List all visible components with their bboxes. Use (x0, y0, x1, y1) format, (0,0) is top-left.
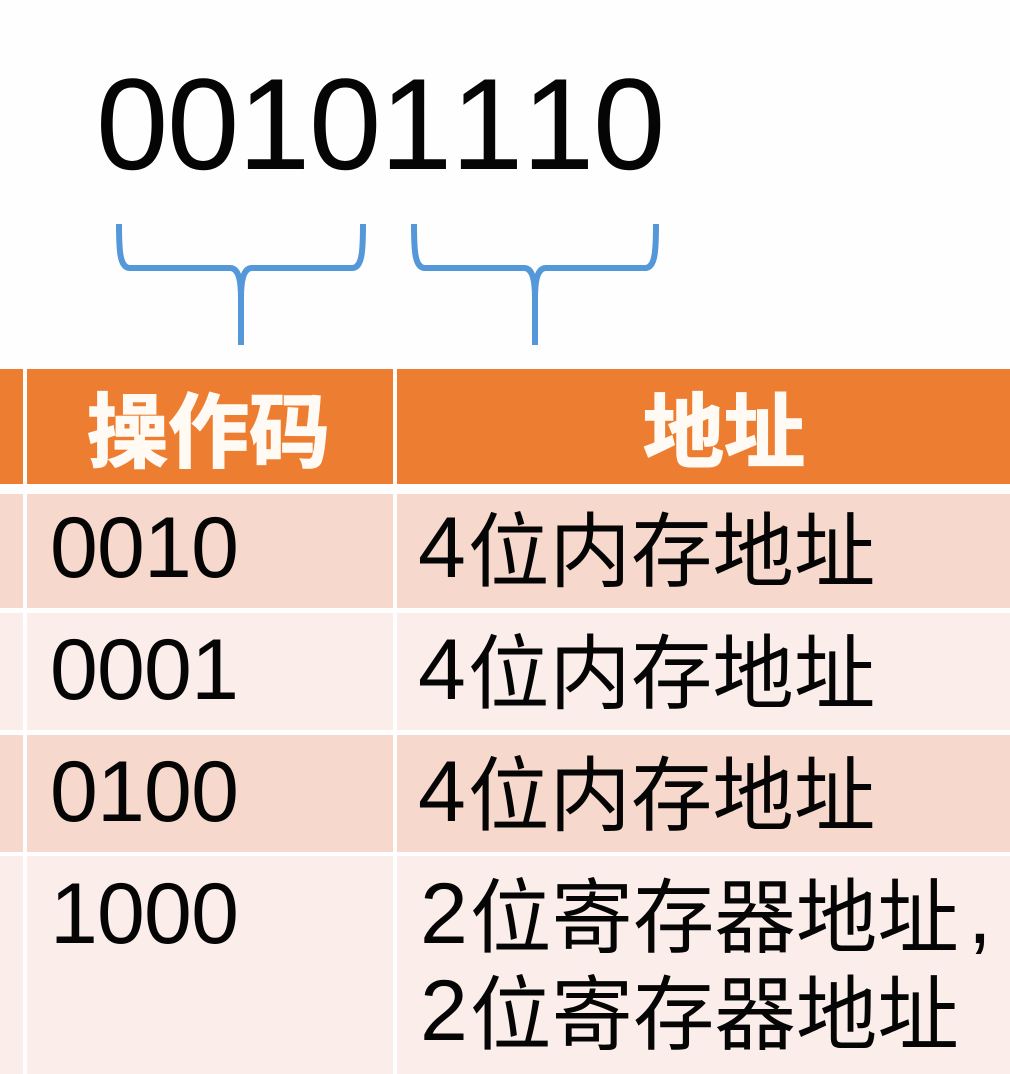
table header row (0, 369, 1010, 484)
bracket connectors (116, 224, 659, 345)
opcode 0010: 0010 (50, 500, 238, 596)
opcode 0001: 0001 (50, 622, 238, 718)
row 1 (0, 494, 1010, 608)
bracket: opcode bits (119, 224, 363, 345)
opcode 1000: 1000 (50, 866, 238, 962)
header: opcode: 操作码 (87, 389, 330, 479)
bracket: address bits (414, 224, 656, 345)
address 4-bit memory: 4位内存地址 (418, 500, 875, 598)
header: address: 地址 (643, 389, 805, 479)
binary instruction number: 00101110 (96, 51, 664, 197)
address 4-bit memory: 4位内存地址 (418, 744, 875, 842)
instruction table (0, 369, 1010, 1074)
address line 2: 2位寄存器地址 (420, 963, 959, 1061)
row 4 (0, 856, 1010, 1074)
opcode 0100: 0100 (50, 744, 238, 840)
row 3 (0, 735, 1010, 852)
address line 1: 2位寄存器地址, (420, 866, 992, 964)
address 4-bit memory: 4位内存地址 (418, 622, 875, 720)
row 2 (0, 613, 1010, 730)
